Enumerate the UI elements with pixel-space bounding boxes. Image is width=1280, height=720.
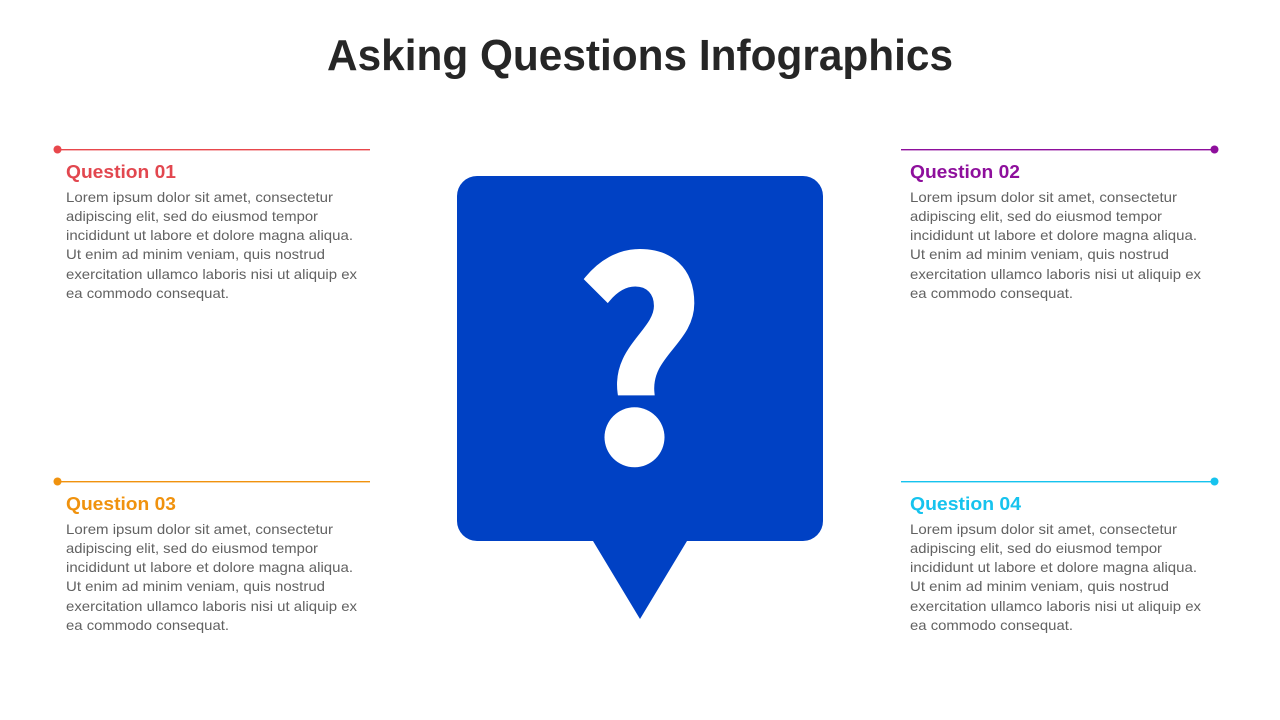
text block: question 02: incididunt ut labore et dolore magna aliqua. (910, 227, 1197, 243)
heading: question 02: Question 02 (910, 161, 1020, 182)
text block: question 03: incididunt ut labore et dolore magna aliqua. (66, 559, 353, 575)
text block: question 01: adipiscing elit, sed do eiusmod tempor (66, 208, 318, 224)
text block: question 04: adipiscing elit, sed do eiusmod tempor (910, 540, 1162, 556)
text block: question 03: adipiscing elit, sed do eiusmod tempor (66, 540, 318, 556)
question mark (584, 249, 694, 468)
text block: question 02: ea commodo consequat. (910, 285, 1073, 301)
text block: question 02: exercitation ullamco laboris nisi ut aliquip ex (910, 266, 1201, 282)
connector line with dot: question 03 (54, 478, 370, 486)
text block: question 02: Ut enim ad minim veniam, quis nostrud (910, 246, 1169, 262)
panel: question 04 (901, 478, 1218, 633)
connector line with dot: question 02 (901, 146, 1218, 154)
connector line with dot: question 04 (901, 478, 1218, 486)
text block: question 03: Lorem ipsum dolor sit amet, consectetur (66, 521, 333, 537)
text block: question 04: incididunt ut labore et dolore magna aliqua. (910, 559, 1197, 575)
connector line with dot: question 01 (54, 146, 370, 154)
heading: question 03: Question 03 (66, 493, 176, 514)
icon: speech bubble with question mark (457, 148, 823, 619)
text block: question 01 (66, 189, 357, 301)
text block: question 04: Ut enim ad minim veniam, quis nostrud (910, 578, 1169, 594)
text block: question 04: ea commodo consequat. (910, 617, 1073, 633)
text block: question 04 (910, 521, 1201, 633)
text block: question 01: incididunt ut labore et dolore magna aliqua. (66, 227, 353, 243)
panel: question 02 (901, 146, 1218, 301)
panel: question 01 (54, 146, 370, 301)
text block: question 01: Ut enim ad minim veniam, quis nostrud (66, 246, 325, 262)
text block: question 01: Lorem ipsum dolor sit amet, consectetur (66, 189, 333, 205)
heading: question 01: Question 01 (66, 161, 176, 182)
text block: question 03 (66, 521, 357, 633)
text block: question 01: exercitation ullamco laboris nisi ut aliquip ex (66, 266, 357, 282)
text block: question 02: Lorem ipsum dolor sit amet, consectetur (910, 189, 1177, 205)
text block: question 01: ea commodo consequat. (66, 285, 229, 301)
text block: question 03: exercitation ullamco laboris nisi ut aliquip ex (66, 598, 357, 614)
text block: question 04: exercitation ullamco laboris nisi ut aliquip ex (910, 598, 1201, 614)
panel: question 03 (54, 478, 370, 633)
text block: question 03: Ut enim ad minim veniam, quis nostrud (66, 578, 325, 594)
text block: question 03: ea commodo consequat. (66, 617, 229, 633)
text block: question 04: Lorem ipsum dolor sit amet, consectetur (910, 521, 1177, 537)
text block: question 02: adipiscing elit, sed do eiusmod tempor (910, 208, 1162, 224)
heading: question 04: Question 04 (910, 493, 1022, 514)
question mark: ? (576, 148, 704, 539)
speech bubble (457, 176, 823, 619)
title: Asking Questions Infographics (327, 31, 953, 80)
text block: question 02 (910, 189, 1201, 301)
